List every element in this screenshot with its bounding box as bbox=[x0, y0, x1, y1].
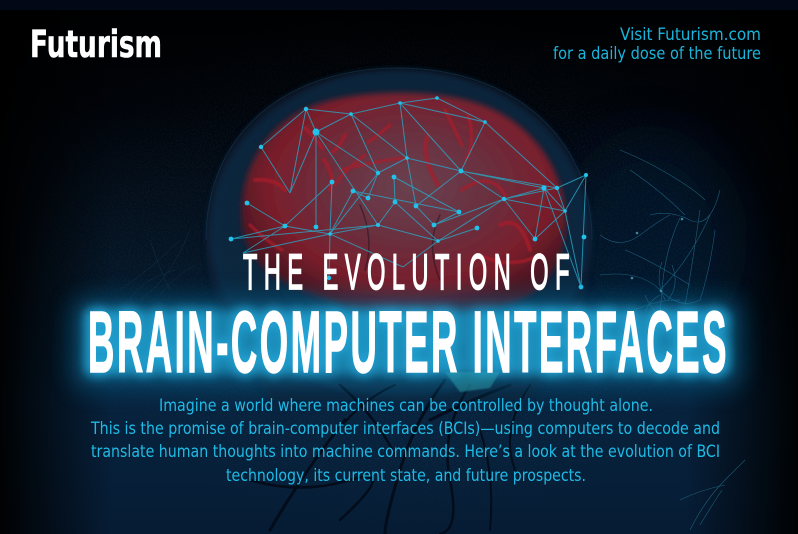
top right link text bbox=[553, 25, 761, 64]
brain blood vessels bbox=[250, 110, 540, 262]
top right link text: Visit Futurism.com bbox=[620, 25, 761, 45]
network nodes bbox=[229, 96, 588, 289]
neuron network right bbox=[600, 150, 745, 530]
dark roots below brain bbox=[250, 205, 530, 534]
circuit network over brain bbox=[229, 96, 588, 289]
intro paragraph bbox=[90, 396, 720, 486]
intro paragraph: technology, its current state, and future prospects. bbox=[226, 466, 586, 486]
intro paragraph: Imagine a world where machines can be controlled by thought alone. bbox=[159, 396, 653, 416]
top right link text: for a daily dose of the future bbox=[553, 44, 761, 64]
neuron network left bbox=[120, 230, 195, 300]
logo: Futurism: Futurism bbox=[30, 23, 162, 66]
title glow band bbox=[72, 298, 742, 392]
head silhouette bbox=[206, 68, 592, 400]
neuron bright points bbox=[631, 218, 683, 292]
brain bbox=[241, 93, 566, 315]
